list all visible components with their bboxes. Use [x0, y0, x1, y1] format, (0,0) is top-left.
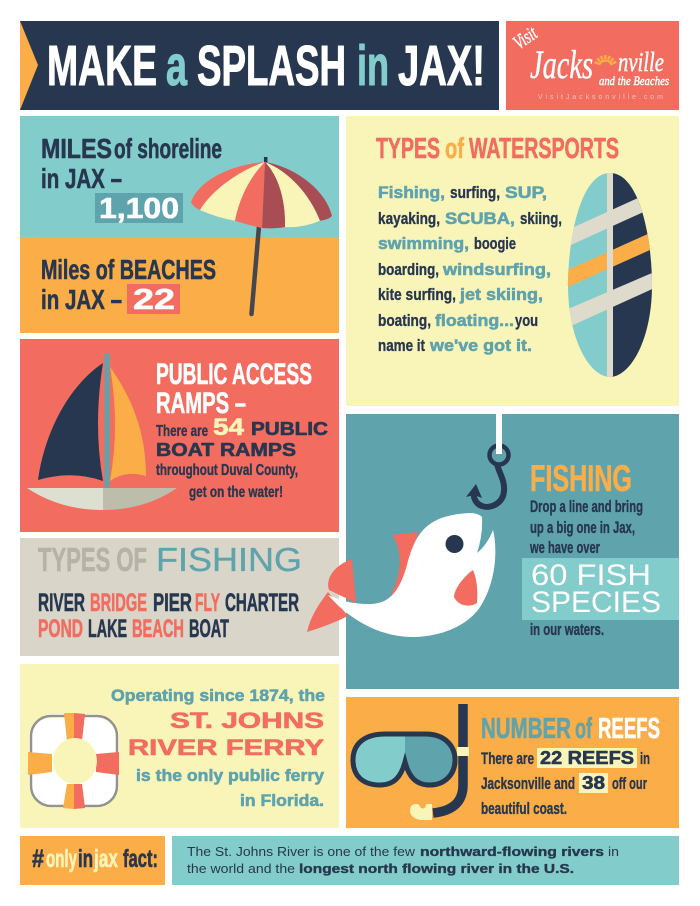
- panel: river fact: northward-flowing rivers: [420, 844, 604, 859]
- icon: surfboard: [568, 173, 652, 377]
- text block: watersports list: kite surfing,: [378, 285, 456, 304]
- text block: public access ramps: RAMPS –: [156, 387, 246, 420]
- text block: fishing: FISHING: [530, 458, 632, 499]
- logo panel: and the Beaches: [599, 73, 669, 88]
- panel: river fact: longest north flowing river in the U.S.: [299, 861, 574, 876]
- text block: fishing: SPECIES: [531, 586, 661, 619]
- text block: reefs: Jacksonville and: [481, 774, 575, 793]
- text block: watersports list: name it: [378, 336, 425, 355]
- text block: watersports list: swimming,: [378, 234, 469, 253]
- panel: fishing: [346, 414, 679, 689]
- text block: public access ramps: PUBLIC ACCESS: [156, 358, 312, 391]
- text block: watersports list: boating,: [378, 311, 431, 330]
- text block: public access ramps: [156, 358, 328, 501]
- text block: ferry: [111, 686, 325, 810]
- text block: fishing: 60 FISH: [531, 559, 651, 592]
- text block: public access ramps: throughout Duval County,: [156, 462, 298, 479]
- text block: fishing types: CHARTER: [225, 589, 299, 617]
- panel: miles of beaches: [20, 238, 339, 333]
- text block: ferry: ST. JOHNS: [170, 708, 324, 733]
- panel: st johns river ferry: [20, 664, 339, 828]
- text block: watersports list: you: [515, 311, 538, 330]
- text block: ferry: is the only public ferry: [136, 766, 325, 785]
- text block: public access ramps: get on the water!: [189, 484, 283, 501]
- title: MAKE: [47, 34, 157, 98]
- text block: fishing: we have over: [529, 538, 600, 557]
- panel: miles of shoreline: [20, 116, 339, 238]
- heading: types of watersports: WATERSPORTS: [469, 133, 619, 165]
- panel: types of fishing: FISHING: [156, 541, 302, 578]
- text block: fishing types: FLY: [195, 589, 220, 617]
- title: in: [357, 34, 389, 98]
- panel: types of fishing: [20, 538, 339, 656]
- panel: types of watersports: [346, 116, 679, 406]
- panel: onlyinjax fact label: jax: [93, 845, 118, 873]
- panel: miles of shoreline: MILES: [41, 133, 112, 164]
- text block: watersports list: kayaking,: [378, 209, 440, 228]
- panel: onlyinjax fact label: #: [32, 845, 44, 873]
- text block: watersports list: floating...: [435, 311, 514, 330]
- panel: miles of beaches: Miles of BEACHES: [41, 254, 216, 285]
- title: SPLASH: [197, 34, 346, 98]
- text block: fishing types: BOAT: [189, 615, 229, 643]
- logo panel: VisitJacksonville.com: [538, 94, 663, 101]
- panel: number of reefs: [346, 697, 679, 828]
- title: a: [166, 34, 188, 98]
- icon: fish: [307, 513, 495, 637]
- panel: types of fishing: TYPES OF: [38, 541, 147, 578]
- icon: snorkel mask: [353, 704, 469, 820]
- panel: river fact: the world and the: [187, 861, 295, 876]
- panel: miles of beaches: 22: [133, 284, 175, 316]
- panel: onlyinjax fact label: fact:: [123, 845, 158, 873]
- text block: reefs: beautiful coast.: [481, 799, 567, 818]
- text block: reefs: 38: [582, 773, 605, 793]
- heading: types of watersports: [376, 133, 619, 165]
- text block: reefs: of: [575, 713, 592, 745]
- text block: watersports list: boogie: [474, 234, 516, 253]
- text block: watersports list: windsurfing,: [442, 260, 551, 279]
- logo panel: Visit: [509, 22, 542, 54]
- text block: watersports list: SUP,: [505, 183, 547, 202]
- panel: miles of shoreline: 1,100: [99, 193, 179, 225]
- heading: types of watersports: TYPES: [376, 133, 440, 165]
- panel: onlyinjax fact label: [20, 836, 165, 885]
- text block: reefs: REEFS: [598, 713, 660, 745]
- text block: public access ramps: PUBLIC: [251, 419, 328, 439]
- text block: fishing: up a big one in Jax,: [530, 518, 635, 537]
- text block: ferry: in Florida.: [240, 791, 324, 810]
- text block: watersports list: jet skiing,: [459, 285, 543, 304]
- text block: fishing types: LAKE: [88, 615, 127, 643]
- text block: fishing types: RIVER: [38, 589, 85, 617]
- title: [47, 34, 485, 98]
- logo panel: nville: [618, 47, 664, 77]
- icon: fish hook: [466, 414, 508, 507]
- text block: reefs: in: [640, 749, 650, 768]
- text block: fishing types: PIER: [153, 589, 192, 617]
- text block: reefs: [481, 713, 660, 818]
- text block: public access ramps: BOAT RAMPS: [156, 440, 296, 460]
- text block: watersports list: SCUBA,: [445, 209, 515, 228]
- text block: fishing types: POND: [38, 615, 83, 643]
- header banner: [20, 21, 499, 110]
- text block: watersports list: [378, 183, 562, 355]
- panel: river fact: in: [608, 844, 619, 859]
- logo panel: Jacks: [530, 42, 593, 87]
- panel: river fact: The St. Johns River is one of the few: [187, 844, 416, 859]
- panel: miles of shoreline: in JAX –: [41, 163, 122, 194]
- icon: life ring: [28, 713, 119, 809]
- text block: fishing: in our waters.: [530, 620, 604, 639]
- icon: sailboat: [27, 353, 177, 510]
- panel: miles of beaches: in JAX –: [41, 284, 122, 315]
- text block: reefs: off our: [612, 774, 647, 793]
- text block: watersports list: Fishing,: [378, 183, 445, 202]
- text block: ferry: RIVER FERRY: [128, 735, 324, 760]
- text block: reefs: 22 REEFS: [540, 748, 634, 768]
- heading: types of watersports: of: [445, 133, 464, 165]
- text block: watersports list: surfing,: [450, 183, 500, 202]
- text block: watersports list: we've got it.: [429, 336, 532, 355]
- text block: fishing types: BRIDGE: [90, 589, 147, 617]
- title: JAX!: [398, 34, 485, 98]
- text block: fishing: [522, 458, 679, 639]
- panel: onlyinjax fact label: in: [78, 845, 93, 873]
- text block: fishing: Drop a line and bring: [530, 497, 643, 516]
- text block: reefs: There are: [481, 749, 534, 768]
- text block: watersports list: skiing,: [520, 209, 562, 228]
- text block: reefs: NUMBER: [481, 713, 571, 745]
- text block: fishing types: BEACH: [132, 615, 184, 643]
- text block: fishing types: [38, 589, 299, 643]
- panel: river fact: [172, 836, 679, 885]
- panel: miles of shoreline: of shoreline: [114, 133, 222, 164]
- text block: public access ramps: 54: [213, 414, 245, 441]
- text block: ferry: Operating since 1874, the: [111, 686, 325, 705]
- logo panel: [506, 21, 679, 110]
- icon: beach umbrella: [191, 157, 332, 314]
- text block: public access ramps: There are: [156, 423, 208, 440]
- panel: onlyinjax fact label: only: [46, 845, 77, 873]
- text block: watersports list: boarding,: [378, 260, 439, 279]
- panel: public access ramps: [20, 339, 339, 532]
